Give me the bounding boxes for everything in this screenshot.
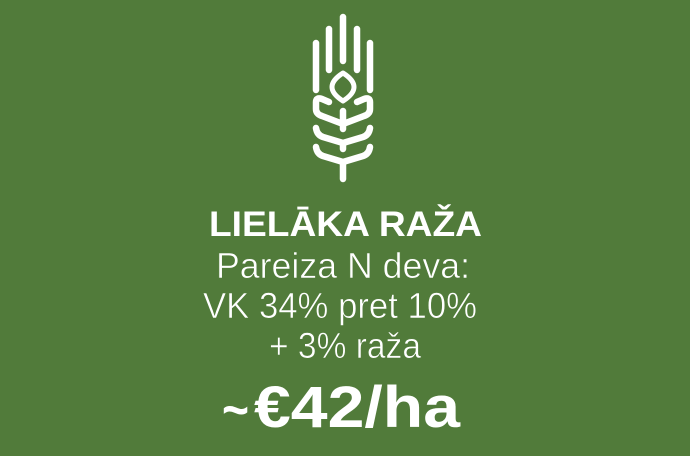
text block: correct N dose xyxy=(203,245,477,366)
amount: €42/ha xyxy=(254,375,461,440)
text line: dose label: Pareiza N deva: xyxy=(216,245,470,286)
text line: yield gain: + 3% raža xyxy=(269,325,422,366)
heading: LIELĀKA RAŽA xyxy=(209,204,482,244)
tilde: ~ xyxy=(222,380,249,440)
value: gain per hectare xyxy=(222,375,461,440)
icon: wheat ear xyxy=(316,17,370,179)
text line: protein comparison: VK 34% pret 10% xyxy=(203,285,477,326)
